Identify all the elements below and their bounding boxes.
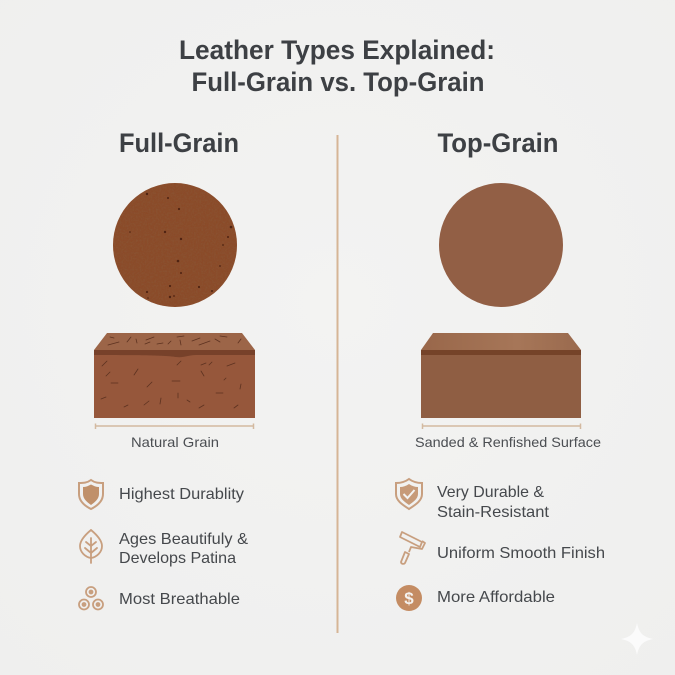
title: Full-Grain vs. Top-Grain	[192, 67, 484, 97]
bracket: surface width	[422, 424, 580, 429]
feature: durability	[79, 480, 244, 509]
text: Very Durable &	[437, 484, 544, 501]
feature: breathable	[79, 587, 240, 610]
text: More Affordable	[437, 589, 555, 606]
panel: full-grain	[79, 128, 255, 610]
icon: shield with check	[396, 479, 422, 509]
feature: smooth finish	[400, 532, 605, 564]
block: full-grain cross-section	[94, 333, 255, 418]
text	[437, 484, 550, 521]
text: Uniform Smooth Finish	[437, 545, 605, 562]
text	[119, 531, 248, 567]
icon: paint roller	[400, 532, 425, 564]
title: Leather Types Explained:	[179, 35, 495, 65]
feature: patina	[80, 530, 248, 567]
icon: dollar coin	[396, 585, 422, 611]
block: top-grain cross-section	[421, 333, 581, 418]
caption: natural grain: Natural Grain	[131, 434, 219, 450]
caption: sanded surface: Sanded & Renfished Surface	[415, 434, 601, 450]
icon: dollar coin: $	[404, 589, 414, 608]
text: Stain-Resistant	[437, 504, 550, 521]
text: Highest Durablity	[119, 486, 244, 503]
feature: stain-resistant	[396, 479, 550, 521]
title	[179, 35, 495, 97]
swatch: full-grain surface	[113, 183, 237, 307]
text: Ages Beautifuly &	[119, 531, 248, 548]
heading: full-grain: Full-Grain	[119, 128, 239, 158]
bracket: grain width	[96, 424, 254, 429]
panel: top-grain	[396, 128, 605, 611]
feature: affordable	[396, 585, 555, 611]
icon: three circles	[79, 587, 103, 610]
icon: shield	[79, 480, 103, 509]
heading: top-grain: Top-Grain	[438, 128, 558, 158]
icon: sparkle watermark	[621, 623, 653, 655]
divider	[336, 135, 338, 633]
icon: leaf	[80, 530, 102, 563]
text: Develops Patina	[119, 550, 236, 567]
text: Most Breathable	[119, 591, 240, 608]
swatch: top-grain surface	[439, 183, 563, 307]
